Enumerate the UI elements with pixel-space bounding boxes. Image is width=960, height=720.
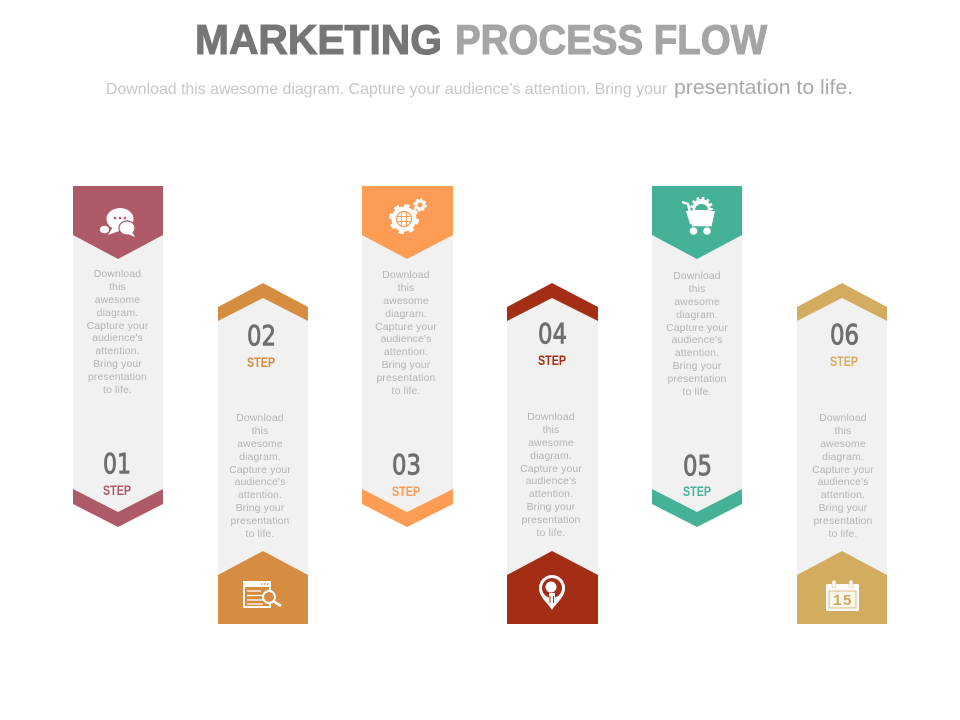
header banner: step 03 bbox=[362, 186, 453, 259]
description: step 04: diagram. bbox=[530, 451, 572, 462]
description: step 05: presentation bbox=[668, 374, 727, 385]
description: step 06: Download bbox=[819, 413, 867, 424]
description: step 05: to life. bbox=[683, 387, 711, 398]
description: step 04: to life. bbox=[537, 528, 565, 539]
description: step 01: audience's bbox=[92, 333, 143, 344]
panel: step 03 bbox=[362, 186, 453, 527]
top chevron: step 06 bbox=[797, 283, 887, 321]
step label 03: STEP bbox=[392, 484, 420, 499]
description: step 01: Download bbox=[94, 269, 141, 280]
panel background: step 03 bbox=[362, 230, 453, 512]
title: MARKETING bbox=[195, 16, 442, 63]
description: step 01: awesome bbox=[95, 295, 140, 306]
subtitle bbox=[106, 77, 853, 99]
step label 01: STEP bbox=[103, 483, 131, 498]
step number 03: 03 bbox=[392, 448, 421, 481]
description: step 06: attention. bbox=[821, 490, 865, 501]
panel: step 06 bbox=[797, 283, 887, 624]
top chevron: step 02 bbox=[218, 283, 308, 321]
step number 06: 06 bbox=[830, 318, 859, 351]
description: step 03: attention. bbox=[384, 347, 428, 358]
description: step 01: to life. bbox=[103, 385, 132, 396]
description: step 05: Capture your bbox=[666, 323, 728, 334]
bottom chevron: step 03 bbox=[362, 489, 453, 527]
description: step 04: this bbox=[543, 425, 559, 436]
footer banner: step 06 bbox=[797, 551, 887, 624]
icon: location pin bbox=[539, 575, 565, 610]
panel: step 01 bbox=[73, 186, 163, 527]
description: step 02: this bbox=[252, 426, 268, 437]
description: step 06: awesome bbox=[820, 439, 866, 450]
panel background: step 04 bbox=[507, 298, 598, 580]
description: step 01: attention. bbox=[95, 346, 140, 357]
description: step 06: presentation bbox=[814, 516, 873, 527]
description: step 02: presentation bbox=[230, 516, 290, 527]
description: step 03: Capture your bbox=[375, 322, 437, 333]
icon: speech bubbles bbox=[100, 208, 135, 237]
description: step 04: audience's bbox=[526, 476, 576, 487]
description: step 02: to life. bbox=[246, 529, 274, 540]
description: step 03: diagram. bbox=[385, 309, 427, 320]
description: step 06: to life. bbox=[829, 529, 857, 540]
title bbox=[195, 16, 768, 63]
icon: calendar: 15 bbox=[833, 592, 853, 609]
description: step 04: awesome bbox=[528, 438, 574, 449]
header banner: step 05 bbox=[652, 186, 742, 259]
panel background: step 05 bbox=[652, 230, 742, 512]
description: step 05: audience's bbox=[672, 335, 722, 346]
step number 02: 02 bbox=[247, 319, 276, 352]
description: step 06: this bbox=[835, 426, 851, 437]
panel: step 04 bbox=[507, 283, 598, 624]
header banner: step 01 bbox=[73, 186, 163, 259]
panel background: step 02 bbox=[218, 298, 308, 580]
step number 05: 05 bbox=[683, 449, 712, 482]
description: step 02: attention. bbox=[238, 490, 282, 501]
description: step 04: Download bbox=[527, 412, 575, 423]
description: step 01: diagram. bbox=[97, 308, 138, 319]
description: step 02: awesome bbox=[237, 439, 283, 450]
description: step 05: this bbox=[689, 284, 705, 295]
step number 04: 04 bbox=[538, 317, 567, 350]
description: step 03: this bbox=[398, 283, 414, 294]
top chevron: step 04 bbox=[507, 283, 598, 321]
icon: calendar bbox=[826, 580, 859, 611]
description: step 04: Bring your bbox=[527, 502, 576, 513]
description: step 03: awesome bbox=[383, 296, 429, 307]
description: step 02: diagram. bbox=[239, 452, 281, 463]
description: step 01: this bbox=[109, 282, 126, 293]
description: step 05: Download bbox=[673, 271, 721, 282]
icon: browser with magnifier bbox=[243, 581, 281, 608]
icon: gears with globe bbox=[390, 199, 426, 232]
bottom chevron: step 05 bbox=[652, 489, 742, 527]
title: PROCESS FLOW bbox=[455, 16, 768, 63]
description: step 05: attention. bbox=[675, 348, 719, 359]
panel: step 05 bbox=[652, 186, 742, 527]
subtitle: presentation to life. bbox=[674, 77, 853, 99]
description: step 06: audience's bbox=[818, 477, 868, 488]
description: step 04: Capture your bbox=[520, 464, 582, 475]
description: step 02: Download bbox=[236, 413, 284, 424]
step label 02: STEP bbox=[247, 355, 275, 370]
description: step 03: presentation bbox=[376, 373, 436, 384]
bottom chevron: step 01 bbox=[73, 489, 163, 527]
description: step 06: diagram. bbox=[822, 452, 864, 463]
description: step 05: diagram. bbox=[676, 310, 718, 321]
description: step 05: Bring your bbox=[673, 361, 722, 372]
step label 05: STEP bbox=[683, 484, 711, 499]
panel background: step 06 bbox=[797, 298, 887, 580]
description: step 03: audience's bbox=[381, 334, 431, 345]
description: step 02: audience's bbox=[235, 477, 285, 488]
description: step 03: to life. bbox=[392, 386, 420, 397]
panel: step 02 bbox=[218, 283, 308, 624]
description: step 05: awesome bbox=[674, 297, 720, 308]
description: step 02: Bring your bbox=[236, 503, 285, 514]
step label 04: STEP bbox=[538, 353, 566, 368]
description: step 06: Capture your bbox=[812, 465, 874, 476]
description: step 04: presentation bbox=[522, 515, 581, 526]
step label 06: STEP bbox=[830, 354, 858, 369]
description: step 01: Bring your bbox=[93, 359, 142, 370]
description: step 06: Bring your bbox=[819, 503, 868, 514]
description: step 02: Capture your bbox=[229, 465, 291, 476]
subtitle: Download this awesome diagram. Capture your audience’s attention. Bring your bbox=[106, 81, 668, 98]
description: step 01: Capture your bbox=[87, 321, 149, 332]
description: step 03: Bring your bbox=[382, 360, 431, 371]
description: step 04: attention. bbox=[529, 489, 573, 500]
panel background: step 01 bbox=[73, 230, 163, 512]
footer banner: step 02 bbox=[218, 551, 308, 624]
description: step 03: Download bbox=[382, 270, 430, 281]
icon: shopping cart with gear bbox=[682, 198, 715, 235]
description: step 01: presentation bbox=[88, 372, 147, 383]
step number 01: 01 bbox=[103, 447, 131, 480]
footer banner: step 04 bbox=[507, 551, 598, 624]
